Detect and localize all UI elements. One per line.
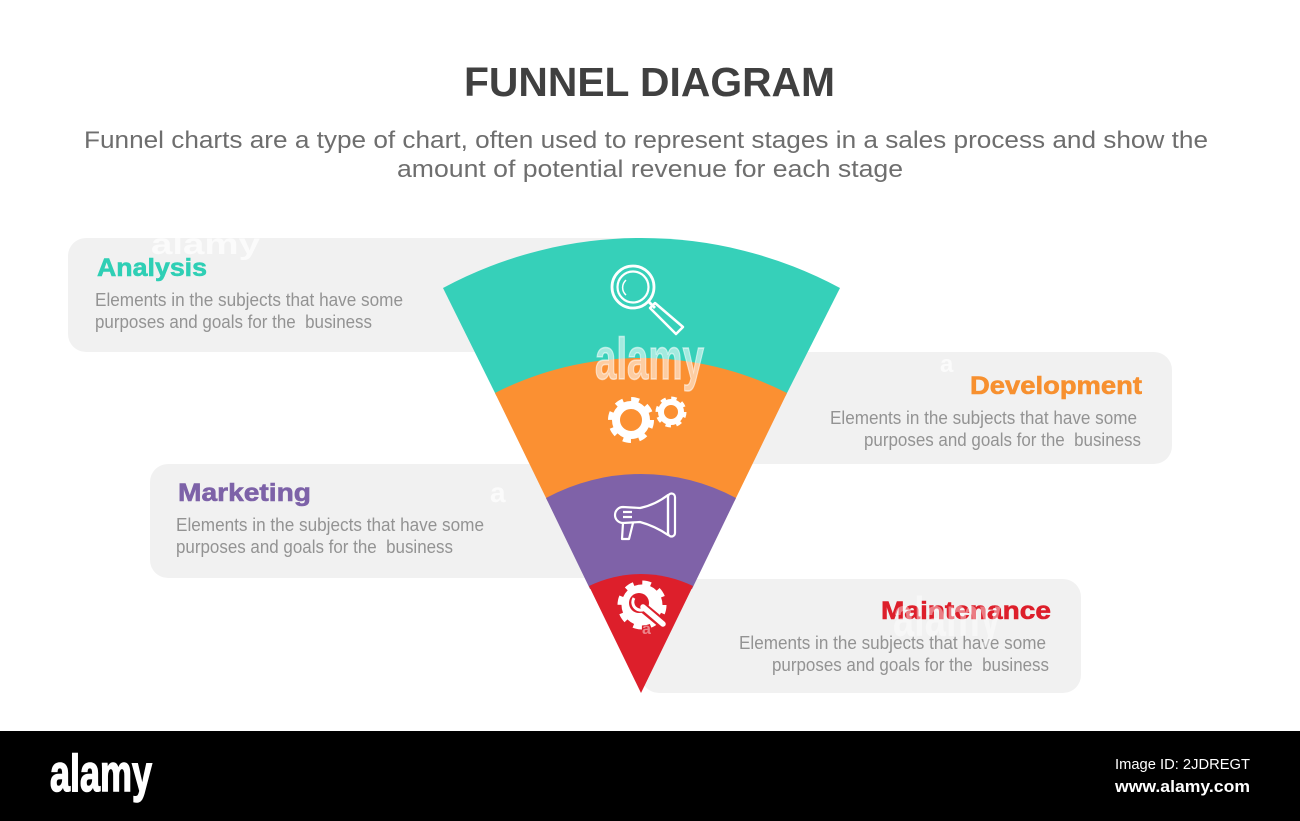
heading: maintenance: Maintenance: [881, 597, 1051, 625]
panel: maintenance: [641, 579, 1081, 693]
heading: marketing: Marketing: [178, 479, 311, 507]
heading: development: Development: [970, 372, 1143, 400]
text: maintenance description: purposes and goals for the business: [772, 655, 1049, 675]
panel: marketing: [150, 464, 641, 578]
watermark: red segment letter: a: [642, 621, 651, 638]
watermark: center: alamy: [595, 327, 704, 392]
text: maintenance description: Elements in the subjects that have some: [739, 633, 1046, 653]
subtitle: Funnel charts are a type of chart, often used to represent stages in a sales process and show the: [84, 127, 1208, 154]
watermark: top panel: alamy: [151, 228, 260, 261]
watermark: maintenance panel: alamy: [893, 585, 1001, 648]
text: development description: [830, 408, 1141, 450]
watermark: marketing letter: a: [490, 477, 506, 508]
funnel: teal segment: [443, 238, 840, 396]
funnel: red segment: [589, 574, 693, 693]
subtitle: amount of potential revenue for each stage: [397, 156, 903, 183]
panel: analysis: [68, 228, 641, 352]
website: www.alamy.com: [1114, 777, 1250, 796]
title: FUNNEL DIAGRAM: [464, 59, 835, 105]
footer logo: alamy: [50, 745, 152, 803]
text: marketing description: [176, 515, 484, 557]
subtitle: [84, 127, 1208, 183]
text: analysis description: [95, 290, 403, 332]
footer bar: [0, 731, 1300, 821]
text: development description: purposes and goals for the business: [864, 430, 1141, 450]
text: analysis description: Elements in the subjects that have some: [95, 290, 403, 310]
text: marketing description: Elements in the subjects that have some: [176, 515, 484, 535]
text: development description: Elements in the subjects that have some: [830, 408, 1137, 428]
text: maintenance description: [739, 633, 1049, 675]
heading: analysis: Analysis: [97, 254, 207, 282]
funnel: purple segment: [546, 474, 736, 589]
text: analysis description: purposes and goals for the business: [95, 312, 372, 332]
icon: gears: [610, 398, 684, 440]
icon: megaphone: [615, 494, 675, 539]
funnel: orange segment: [495, 358, 787, 501]
image id: Image ID: 2JDREGT: [1115, 756, 1250, 773]
watermark: development letter: a: [940, 351, 954, 378]
icon: gear with wrench: [620, 583, 664, 627]
panel: development: [641, 351, 1172, 464]
icon: magnifier: [612, 266, 683, 334]
text: marketing description: purposes and goals for the business: [176, 537, 453, 557]
